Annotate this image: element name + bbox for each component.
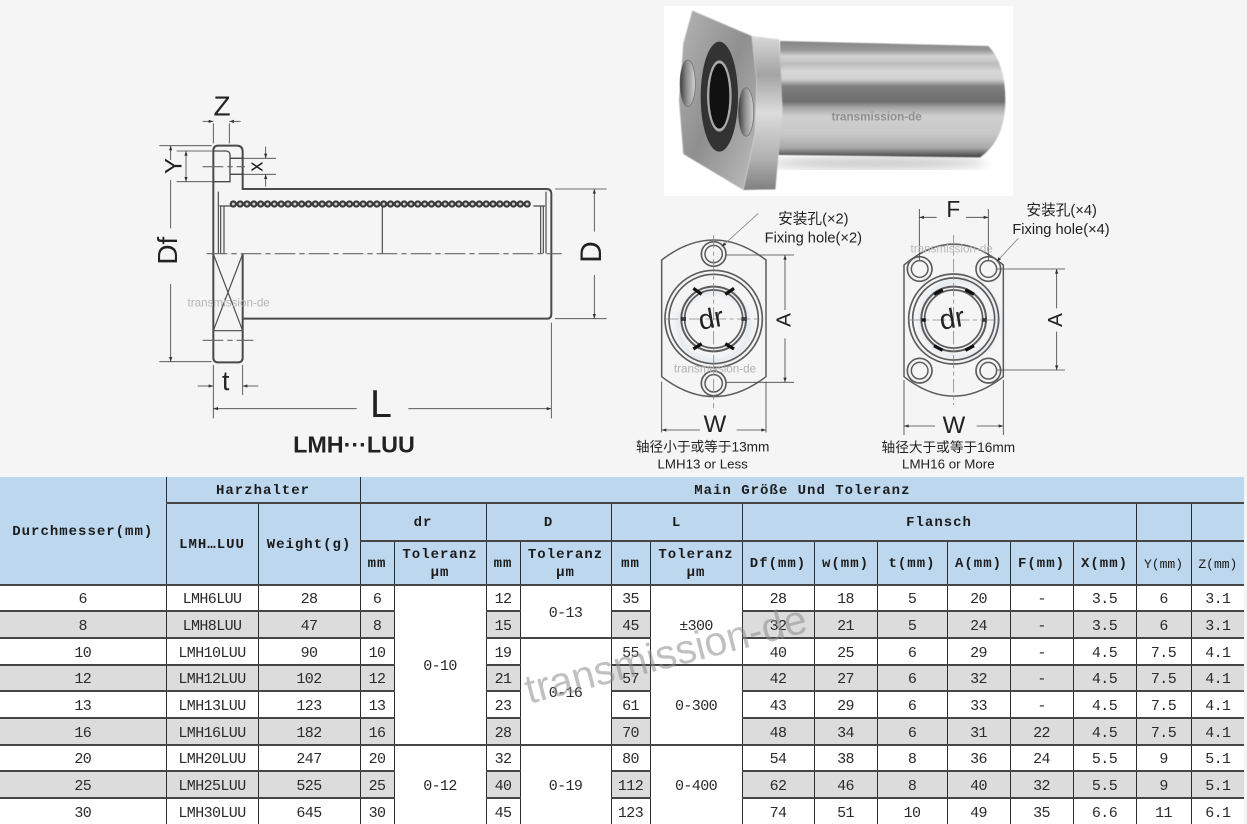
row 20: 20	[74, 751, 91, 768]
row 25: LMH25LUU	[178, 778, 246, 794]
row 12: -	[1037, 671, 1046, 688]
row 16: 16	[369, 724, 385, 742]
labels right: A	[1044, 313, 1067, 327]
table header: top row: 0-300	[675, 698, 717, 715]
row 8: 32	[770, 618, 786, 634]
row 10: 7.5	[1151, 644, 1176, 662]
photo: mounting holes	[680, 60, 754, 136]
dimension labels: D	[575, 241, 608, 263]
photo: flange side	[743, 36, 783, 190]
table header: dimension groups: Flansch	[906, 515, 972, 531]
photo: cylinder body	[778, 41, 1005, 157]
row 10: 40	[770, 644, 786, 662]
row 10: 10	[369, 644, 385, 662]
table header: column names: A(mm)	[955, 556, 1002, 572]
watermark left: transmission-de	[674, 362, 756, 375]
table header: column names: Toleranz	[658, 546, 734, 562]
table header: top row: LMH…LUU	[179, 537, 245, 553]
labels right: 安装孔(×4)	[1026, 202, 1097, 219]
row 16: LMH16LUU	[178, 724, 246, 742]
side section drawing: LMH LUU	[152, 90, 608, 458]
table header: top row	[0, 477, 1244, 822]
product photo	[664, 6, 1013, 196]
centre lines	[203, 167, 562, 340]
row 13: 43	[770, 698, 786, 714]
ball marks left	[681, 288, 747, 349]
row 12: 7.5	[1151, 671, 1176, 688]
row 6: 12	[495, 591, 511, 608]
row 20: 32	[495, 751, 511, 768]
row 8: 21	[837, 618, 854, 634]
photo: watermark: transmission-de	[832, 110, 922, 123]
table header: dimension groups: L	[672, 515, 681, 531]
table header: top row: Harzhalter	[216, 482, 310, 498]
labels right	[882, 196, 1110, 472]
row 10: 4.5	[1092, 644, 1117, 662]
flange and body outline	[213, 146, 551, 362]
photo: shadow	[767, 158, 987, 169]
row 25: 40	[970, 778, 987, 794]
labels right: 轴径大于或等于16mm	[882, 439, 1015, 455]
dimension labels	[152, 90, 608, 426]
row 25: 62	[770, 778, 786, 794]
row 13: 7.5	[1151, 698, 1176, 714]
row 6: 3.5	[1092, 591, 1117, 608]
row 25: 8	[908, 778, 916, 794]
table header: column names	[361, 542, 1244, 584]
row 10: 90	[301, 644, 317, 662]
ball marks right	[921, 290, 987, 350]
row 13: 4.1	[1205, 698, 1230, 714]
row 20: 9	[1159, 751, 1168, 768]
row 30: 6.1	[1205, 804, 1230, 822]
row 10: 29	[970, 644, 987, 662]
table header: top row: 0-400	[675, 778, 717, 795]
row 20	[74, 751, 1230, 795]
row 20: 36	[970, 751, 987, 768]
row 13: 4.5	[1092, 698, 1117, 714]
row 30: 6.6	[1092, 804, 1117, 822]
row 12: LMH12LUU	[178, 671, 246, 688]
row 13: 13	[369, 698, 385, 714]
rings left	[665, 270, 762, 368]
row 13: 29	[837, 698, 854, 714]
table header: top row: Durchmesser(mm)	[12, 524, 153, 540]
row 8: 8	[79, 618, 87, 634]
table header: column names: μm	[687, 564, 705, 580]
row 25: 32	[1033, 778, 1050, 794]
row 8: 3.5	[1092, 618, 1117, 634]
row 8: 15	[495, 618, 511, 634]
row 12: 32	[970, 671, 987, 688]
row 16: 16	[74, 724, 91, 742]
row 10: 55	[622, 644, 639, 662]
row 8: 6	[1159, 618, 1168, 634]
row 20: 247	[296, 751, 322, 768]
row 30: 123	[618, 804, 643, 822]
table header: top row: Main Größe Und Toleranz	[694, 482, 910, 498]
row 25: 25	[369, 778, 385, 794]
table header: dimension groups: dr	[414, 515, 432, 531]
table header: top row: 0-10	[423, 658, 457, 675]
row 12: 42	[770, 671, 786, 688]
row 16: 4.5	[1092, 724, 1117, 742]
row 10: 10	[74, 644, 91, 662]
row 16: 7.5	[1151, 724, 1176, 742]
dimension lines	[159, 121, 607, 418]
model name: LMH···LUU	[293, 432, 415, 458]
labels left: 安装孔(×2)	[778, 211, 849, 228]
row 8: 8	[373, 618, 381, 634]
row 12: 12	[74, 671, 91, 688]
row 6: 28	[770, 591, 786, 608]
row 12: 57	[622, 671, 639, 688]
row 12	[0, 666, 1244, 715]
row 8: 5	[908, 618, 916, 634]
table header: column names: mm	[368, 556, 386, 572]
row 30: 45	[495, 804, 511, 822]
row 13	[74, 698, 1230, 714]
table watermark: transmission-de	[520, 596, 811, 713]
row 13: 61	[622, 698, 639, 714]
table header: column names: t(mm)	[888, 556, 936, 572]
table header: column names: F(mm)	[1018, 556, 1065, 572]
table header: column names: mm	[494, 556, 512, 572]
dimension labels: Df	[152, 236, 183, 265]
flange outline right	[904, 244, 1003, 396]
table header: top row: 0-13	[549, 604, 582, 622]
table header: column names: Toleranz	[528, 546, 603, 562]
row 25: 25	[74, 778, 91, 794]
row 25: 112	[618, 778, 643, 794]
row 6	[79, 591, 1230, 675]
row 25: 525	[296, 778, 322, 794]
row 25	[0, 772, 1244, 797]
table header: top row: ±300	[679, 618, 713, 635]
row 30: 51	[837, 804, 854, 822]
row 13: 33	[970, 698, 987, 714]
row 25: 9	[1159, 778, 1168, 794]
drawing watermark: transmission-de	[188, 296, 270, 309]
dimension labels: Y	[161, 158, 188, 174]
labels right: W	[943, 412, 966, 439]
row 12: 4.1	[1205, 671, 1230, 688]
labels left: 轴径小于或等于13mm	[636, 438, 769, 454]
row 20: 80	[622, 751, 639, 768]
front view: four fixing holes	[882, 196, 1110, 472]
row 10: 6	[908, 644, 916, 662]
row 8	[0, 612, 1244, 637]
rings right	[909, 274, 999, 364]
row 10: LMH10LUU	[178, 644, 246, 662]
row 8: 47	[301, 618, 317, 634]
table header: dimension groups: D	[544, 515, 553, 531]
row 16: 4.1	[1205, 724, 1230, 742]
table header: column names: Y(mm)	[1144, 557, 1183, 572]
labels left: Fixing hole(×2)	[765, 230, 862, 246]
table header: dimension groups	[167, 504, 1244, 584]
table header: column names: μm	[556, 564, 575, 580]
labels right: LMH16 or More	[902, 457, 995, 472]
row 13: 23	[495, 698, 511, 714]
table header: column names: X(mm)	[1081, 556, 1128, 572]
row 13: LMH13LUU	[178, 698, 246, 714]
row 25: 46	[837, 778, 854, 794]
specification table	[0, 477, 1244, 824]
row 10: 4.1	[1205, 644, 1230, 662]
row 25: 5.5	[1092, 778, 1117, 794]
row 20: 8	[908, 751, 916, 768]
row 12: 4.5	[1092, 671, 1117, 688]
table header: top row: 0-12	[423, 778, 457, 795]
row 6: 5	[908, 591, 916, 608]
centre lines left	[665, 235, 763, 408]
row 30: 74	[770, 804, 786, 822]
row 25: 40	[495, 778, 511, 794]
row 6: 18	[837, 591, 854, 608]
row 20: 24	[1033, 751, 1050, 768]
dimensions left	[662, 213, 794, 432]
row 25: 5.1	[1205, 778, 1230, 794]
row 6: LMH6LUU	[183, 591, 241, 608]
row 16: 70	[622, 724, 639, 742]
dimension labels: t	[222, 366, 230, 396]
row 20: LMH20LUU	[178, 751, 246, 768]
row 12: 21	[495, 671, 511, 688]
labels left: W	[704, 411, 727, 438]
dimension labels: L	[370, 382, 392, 426]
row 13: -	[1037, 698, 1046, 714]
row 6: 3.1	[1205, 591, 1230, 608]
labels right: dr	[937, 301, 967, 336]
row 6: 6	[1159, 591, 1168, 608]
centre lines right	[908, 235, 1000, 405]
row 12: 102	[296, 671, 322, 688]
holes right	[907, 257, 1001, 383]
row 16: 31	[970, 724, 987, 742]
row 20: 20	[369, 751, 385, 768]
row 6: 6	[373, 591, 381, 608]
labels left	[636, 211, 862, 472]
row 10: 19	[495, 644, 511, 662]
front view drawings	[636, 196, 1110, 472]
row 12: 6	[908, 671, 916, 688]
row 30: 645	[296, 804, 322, 822]
dimension labels: x	[246, 162, 268, 172]
table header: column names: Z(mm)	[1198, 557, 1237, 572]
photo: bore	[701, 42, 738, 152]
table header: column names: μm	[431, 564, 449, 580]
row 10: -	[1037, 644, 1046, 662]
row 30: LMH30LUU	[178, 804, 246, 822]
row 13: 6	[908, 698, 916, 714]
row 8: -	[1037, 618, 1046, 634]
dimension labels: Z	[213, 90, 231, 121]
row 20: 54	[770, 751, 786, 768]
row 30: 30	[369, 804, 385, 822]
faint blue ring left	[679, 292, 749, 362]
labels left: dr	[696, 301, 726, 336]
labels left: A	[773, 313, 796, 327]
front view: two fixing holes	[636, 211, 862, 472]
row 16: 182	[296, 724, 322, 742]
labels right: F	[946, 196, 960, 222]
row 6: 35	[622, 591, 639, 608]
row 8: 3.1	[1205, 618, 1230, 634]
row 13: 13	[74, 698, 91, 714]
row 6: 28	[301, 591, 317, 608]
row 12: 12	[369, 671, 385, 688]
labels left: LMH13 or Less	[657, 457, 748, 472]
row 6: 20	[970, 591, 987, 608]
row 30: 35	[1033, 804, 1050, 822]
holes left	[701, 242, 726, 396]
table header: top row: 0-16	[549, 684, 582, 702]
row 30: 11	[1155, 804, 1172, 822]
row 8: 24	[970, 618, 987, 634]
row 16: 28	[495, 724, 511, 742]
row 8: 45	[622, 618, 639, 634]
flange outline left	[662, 240, 766, 397]
row 30: 30	[74, 804, 91, 822]
row 20: 5.1	[1205, 751, 1230, 768]
table header: column names: Df(mm)	[750, 556, 806, 572]
table header: column names: Toleranz	[402, 546, 478, 562]
row 8: LMH8LUU	[183, 618, 241, 634]
row 16: 22	[1033, 724, 1050, 742]
flange section cross	[213, 254, 243, 331]
dimensions right	[904, 209, 1065, 435]
row 13: 123	[296, 698, 322, 714]
table header: top row: 0-19	[549, 778, 582, 795]
labels right: Fixing hole(×4)	[1012, 222, 1110, 238]
watermark right: transmission-de	[911, 242, 993, 255]
row 30: 10	[904, 804, 920, 822]
table header: top row: Weight(g)	[267, 537, 351, 553]
row 10	[74, 644, 1230, 702]
bearing retainer lines	[218, 192, 546, 253]
row 30	[74, 804, 1230, 822]
row 16: 34	[837, 724, 854, 742]
row 16: 6	[908, 724, 916, 742]
row 16	[0, 719, 1244, 744]
row 30: 49	[970, 804, 987, 822]
row 6: -	[1037, 591, 1046, 608]
row 10: 25	[837, 644, 854, 662]
row 12: 27	[837, 671, 854, 688]
row 16: 48	[770, 724, 786, 742]
row 20: 5.5	[1092, 751, 1117, 768]
row 6: 6	[79, 591, 87, 608]
ball row	[233, 193, 533, 215]
row 20: 38	[837, 751, 854, 768]
faint blue ring right	[922, 281, 998, 357]
photo: flange face	[679, 11, 757, 190]
table header: column names: w(mm)	[822, 556, 869, 572]
table header: column names: mm	[621, 556, 640, 572]
